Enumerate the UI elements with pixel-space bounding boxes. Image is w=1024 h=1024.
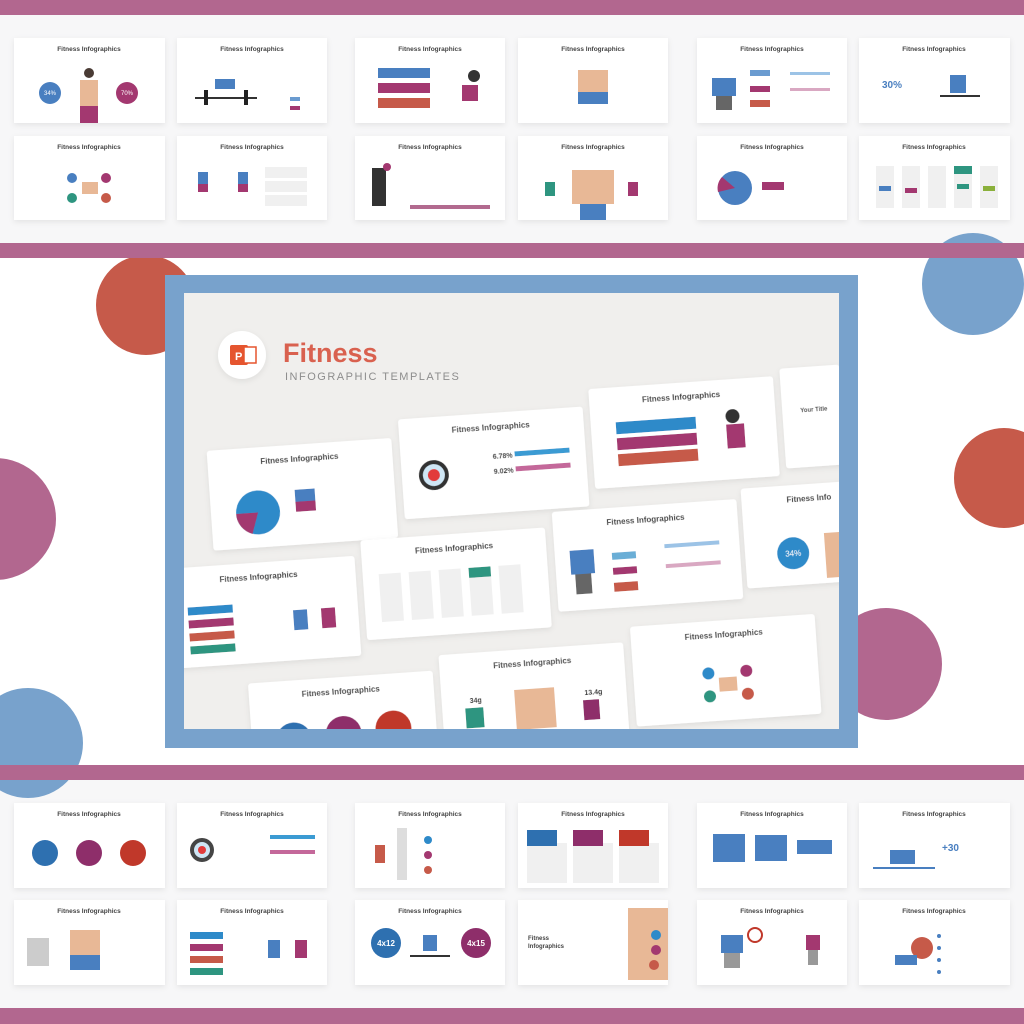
- thumb 8: [177, 136, 327, 220]
- thumb 4: [518, 38, 668, 123]
- decorative circle red left: [96, 255, 196, 355]
- thumb b9 4x12: [355, 900, 505, 985]
- slide: bodybuilder: Fitness Infographics: [493, 656, 572, 670]
- stripe top: [0, 0, 1024, 15]
- thumb 1: [14, 38, 165, 123]
- thumb 6: Fitness Infographics: [902, 46, 966, 53]
- slide: muscle: [630, 614, 821, 727]
- decorative circle blue left: [0, 688, 83, 798]
- slide: dumbbells: [552, 499, 743, 612]
- thumb b9 4x12: 4x15: [467, 939, 485, 948]
- thumb b7 scale: [14, 900, 165, 985]
- decorative circle blue right: [922, 233, 1024, 335]
- slide: dumbbell bars: Fitness Infographics: [415, 541, 494, 556]
- thumb b10 muscle: Fitness: [528, 936, 550, 942]
- thumb 2: [177, 38, 327, 123]
- thumb b2 watch: [177, 803, 327, 888]
- thumb 4: Fitness Infographics: [561, 46, 625, 53]
- thumb 5: Fitness Infographics: [740, 46, 804, 53]
- thumb b3 cable: [355, 803, 505, 888]
- slide: squat: Fitness Infographics: [642, 390, 721, 404]
- thumb 9: Fitness Infographics: [398, 144, 462, 151]
- decorative circle purple right: [830, 608, 942, 720]
- hero header: icon: P: [235, 351, 242, 363]
- hero header: icon: [218, 331, 266, 379]
- hero frame: [159, 275, 868, 788]
- thumb 5: [697, 38, 847, 123]
- thumb b6 situp: +30: [942, 843, 959, 854]
- thumb 7: [14, 136, 165, 220]
- slide: pie: [207, 438, 398, 551]
- thumb b6 situp: Fitness Infographics: [902, 811, 966, 818]
- slide: dumbbells: Fitness Infographics: [606, 513, 685, 527]
- background bottom band: [0, 780, 1024, 1024]
- thumb 2: Fitness Infographics: [220, 46, 284, 53]
- slide: bodybuilder: 13.4g: [584, 689, 603, 697]
- stripe bottom: [0, 1008, 1024, 1024]
- slide: bodybuilder: [438, 642, 629, 729]
- thumb b12 apple: [859, 900, 1010, 985]
- slide: muscle: Fitness Infographics: [684, 628, 764, 642]
- bottom thumbnails grid: [14, 803, 1010, 985]
- slide: heart rate: 34%: [785, 549, 802, 559]
- thumb b8 stretching: Fitness Infographics: [220, 908, 284, 915]
- thumb b11 diet: Fitness Infographics: [740, 908, 804, 915]
- hero title: Fitness: [283, 338, 378, 368]
- thumb b6 situp: [859, 803, 1010, 888]
- background top band: [0, 0, 1024, 258]
- slide: bodybuilder: 34g: [470, 697, 482, 705]
- slide: stretching: Fitness Infographics: [219, 570, 298, 584]
- thumb 10: Fitness Infographics: [561, 144, 625, 151]
- slide: squat: [588, 376, 780, 489]
- decorative circle red right: [954, 428, 1024, 528]
- thumb 12: [859, 136, 1010, 220]
- thumb b4 dumbbells: Fitness Infographics: [561, 811, 625, 818]
- slide: watch: Fitness Infographics: [451, 420, 531, 435]
- slide: kettlebells: [248, 671, 436, 729]
- slide: partial right: Your Title: [800, 406, 828, 414]
- decorative circle purple left: [0, 458, 56, 580]
- slide: watch: 9.02%: [494, 467, 515, 476]
- thumb 3: [355, 38, 505, 123]
- thumb b10 muscle: [518, 900, 668, 985]
- slide: partial right: [779, 365, 846, 469]
- thumb 9: [355, 136, 505, 220]
- top thumbnails grid: [14, 38, 1010, 220]
- thumb b5 clothing: [697, 803, 847, 888]
- thumb b1 kettlebells: Fitness Infographics: [57, 811, 121, 818]
- thumb 10: [518, 136, 668, 220]
- thumb b2 watch: Fitness Infographics: [220, 811, 284, 818]
- thumb b12 apple: Fitness Infographics: [902, 908, 966, 915]
- tilted slides: [184, 365, 839, 729]
- thumb 6: [859, 38, 1010, 123]
- thumb 3: Fitness Infographics: [398, 46, 462, 53]
- slide: watch: [398, 407, 589, 519]
- slide: dumbbell bars: [360, 527, 552, 640]
- slide: heart rate: Fitness Info: [786, 492, 832, 505]
- thumb b11 diet: [697, 900, 847, 985]
- slide: pie: Fitness Infographics: [260, 452, 339, 466]
- thumb 1: 70%: [121, 91, 134, 97]
- slide: kettlebells: Fitness Infographics: [301, 684, 381, 699]
- thumb 1: 34%: [44, 91, 57, 97]
- thumb b3 cable: Fitness Infographics: [398, 811, 462, 818]
- stripe 3: [0, 765, 1024, 780]
- thumb 1: Fitness Infographics: [57, 46, 121, 53]
- slide: heart rate: [741, 482, 839, 590]
- thumb 12: Fitness Infographics: [902, 144, 966, 151]
- slide: watch: 6.78%: [493, 453, 514, 461]
- thumb b5 clothing: Fitness Infographics: [740, 811, 804, 818]
- thumb 6: 30%: [882, 80, 902, 91]
- thumb b4 dumbbells: [518, 803, 668, 888]
- thumb b10 muscle: Infographics: [528, 944, 565, 950]
- thumb 7: Fitness Infographics: [57, 144, 121, 151]
- hero subtitle: INFOGRAPHIC TEMPLATES: [285, 371, 460, 383]
- thumb b8 stretching: [177, 900, 327, 985]
- slide: stretching: [170, 556, 361, 669]
- thumb b7 scale: Fitness Infographics: [57, 908, 121, 915]
- stripe 2: [0, 243, 1024, 258]
- thumb b9 4x12: Fitness Infographics: [398, 908, 462, 915]
- thumb b9 4x12: 4x12: [377, 939, 395, 948]
- thumb 11: Fitness Infographics: [740, 144, 804, 151]
- thumb 11: [697, 136, 847, 220]
- thumb 8: Fitness Infographics: [220, 144, 284, 151]
- thumb b1 kettlebells: [14, 803, 165, 888]
